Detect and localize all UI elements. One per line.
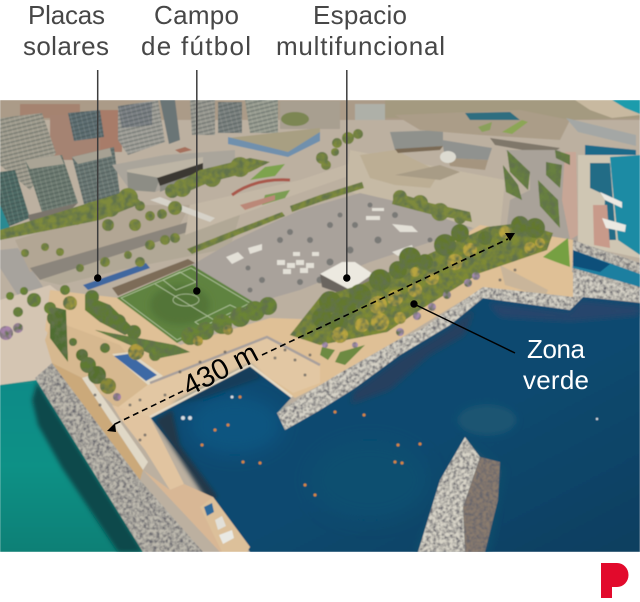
leader line: zona verde [410,300,515,353]
pool walkway edges [150,337,320,417]
small green lawns [320,345,365,365]
lawn at the end of the band [543,238,570,267]
label: zona verde: Zona [527,334,586,364]
tree belts [0,129,570,272]
right-hand breakwater inlet [572,240,640,292]
label: zona verde: verde [523,365,589,395]
roads and urban strip [0,164,290,294]
plaza [192,193,473,303]
label: placas solares: solares [23,31,109,61]
water colour variations [155,300,640,552]
left towers [0,100,278,232]
kayaks and swimmers [200,396,422,496]
base ground [0,100,640,552]
football pitch [117,265,255,343]
deep water harbour [150,297,640,552]
green zone tree band [290,216,553,348]
dimension arrow: 430 m [107,233,515,432]
plaza crowd and stalls [226,208,418,274]
multifunctional space canopy [320,262,373,295]
label: placas solares: Placas [28,0,105,30]
left pier rocks [35,363,203,552]
left pier walkway [52,363,143,480]
brown slope behind pitch [112,259,195,296]
lower left garden [0,285,190,401]
leader line: placas solares [94,70,101,282]
breakwater rocks [277,272,640,430]
trees along pitch edge [181,297,277,346]
leader line: espacio multifuncional [343,70,350,282]
aerial illustration [0,100,640,552]
leader line: campo de fútbol [193,70,200,295]
left sea [0,380,143,552]
right background buildings and lagoons [345,110,640,258]
central large building [112,128,320,192]
solar panels [83,263,163,385]
main sand promenade [45,225,574,417]
label: espacio multifuncional: multifuncional [276,31,445,61]
logo: P [601,563,628,598]
bottom jetty platform [200,497,250,552]
beach at left [0,285,56,386]
garden ground [45,326,146,406]
city skyline background [0,100,640,160]
label: campo de fútbol: Campo [154,0,239,30]
label: espacio multifuncional: Espacio [313,0,407,30]
label: campo de fútbol: de fútbol [141,31,251,61]
people on promenade [94,268,516,442]
dimension arrow: 430 m: 430 m [177,337,264,403]
far jetty [418,437,500,552]
dark shadow of rocks [32,382,143,552]
